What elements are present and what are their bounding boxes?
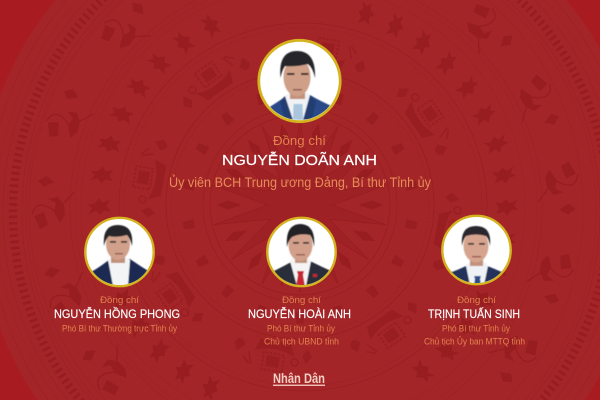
- name: Nguyễn Doãn Anh: NGUYỄN DOÃN ANH: [222, 152, 377, 169]
- portrait: Trịnh Tuấn Sinh: [442, 216, 511, 288]
- label: Đồng chí right: Đồng chí: [457, 295, 496, 306]
- role: Nguyễn Hồng Phong: Phó Bí thư Thường trực Tỉnh ủy: [62, 324, 177, 334]
- label: Đồng chí left: Đồng chí: [100, 295, 139, 306]
- logo: Nhân Dân: Nhân Dân: [273, 371, 325, 386]
- text: Nguyễn Hồng Phong: [54, 295, 180, 334]
- portrait: Nguyễn Doãn Anh: [259, 40, 340, 122]
- text: lead person: [169, 133, 431, 190]
- label: Đồng chí middle: Đồng chí: [282, 295, 321, 306]
- text: Trịnh Tuấn Sinh: [424, 295, 525, 346]
- text: Nguyễn Hoài Anh: [248, 295, 351, 346]
- portrait: Nguyễn Hồng Phong: [85, 218, 154, 290]
- label: Đồng chí: Đồng chí: [273, 133, 326, 148]
- name: Trịnh Tuấn Sinh: TRỊNH TUẤN SINH: [428, 306, 520, 321]
- role line 1: Nguyễn Hoài Anh: Phó Bí thư Tỉnh ủy: [267, 324, 335, 334]
- role line 2: Trịnh Tuấn Sinh: Chủ tịch Ủy ban MTTQ tỉnh: [424, 336, 525, 346]
- role: lead person: Ủy viên BCH Trung ương Đảng, Bí thư Tỉnh ủy: [169, 175, 431, 190]
- portrait: Nguyễn Hoài Anh: [267, 218, 336, 290]
- name: Nguyễn Hồng Phong: NGUYỄN HỒNG PHONG: [54, 306, 180, 321]
- name: Nguyễn Hoài Anh: NGUYỄN HOÀI ANH: [248, 306, 351, 321]
- role line 2: Nguyễn Hoài Anh: Chủ tịch UBND tỉnh: [264, 336, 339, 346]
- role line 1: Trịnh Tuấn Sinh: Phó Bí thư Tỉnh ủy: [442, 324, 510, 334]
